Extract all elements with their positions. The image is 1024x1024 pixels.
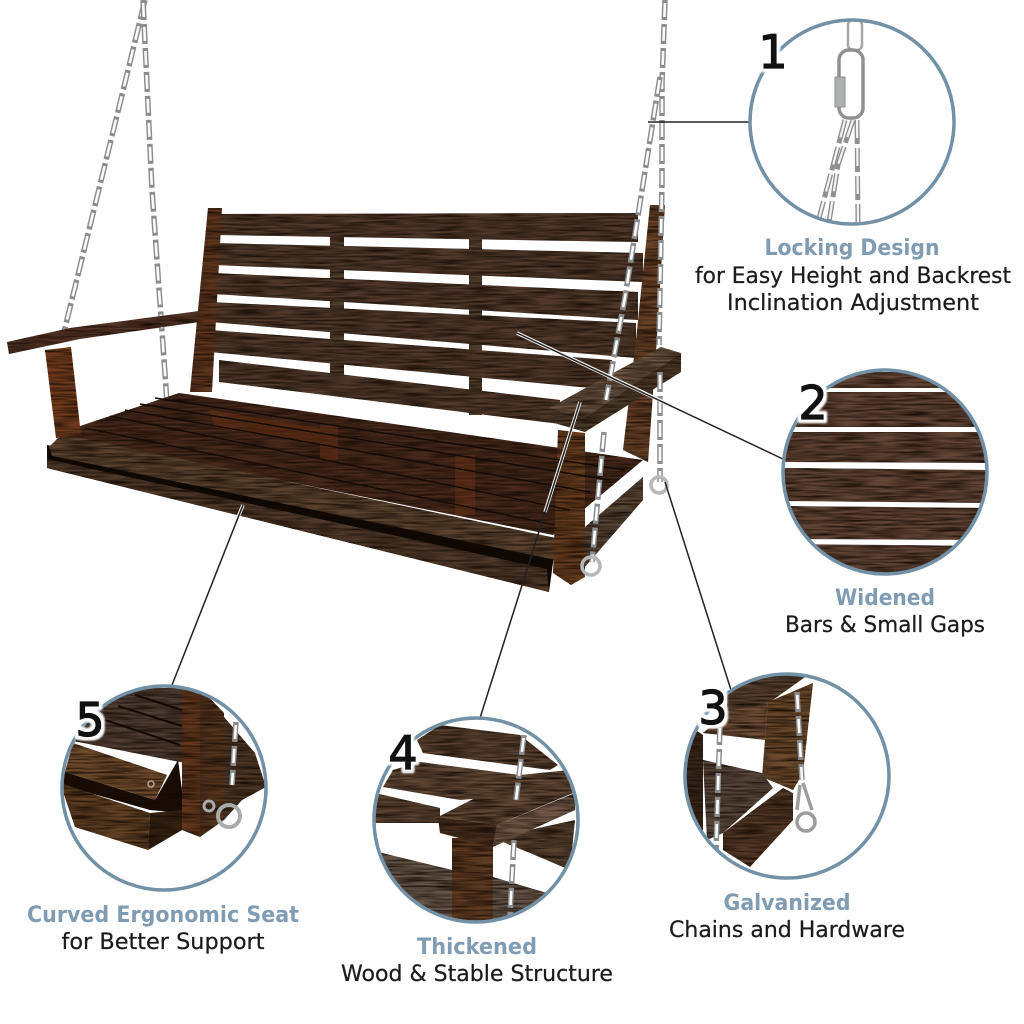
caption 1 [695,236,1011,316]
circle ring [374,718,578,922]
seat front rail [49,434,556,560]
backrest slats [210,213,643,424]
circle ring [685,674,889,878]
circle photo: chain carabiner [818,20,863,222]
number 4: 4 [388,726,418,780]
number 1: 1 [758,25,788,79]
caption 3 [669,891,905,943]
circle ring [62,686,266,890]
detail 2: widened bars [780,370,990,575]
number 3: 3 [698,681,728,735]
caption 5: for Better Support [62,930,265,955]
number 5: 5 [75,693,105,747]
left arm and leg [45,347,81,438]
detail 1: locking design [750,20,954,224]
caption 4: Wood & Stable Structure [341,962,613,987]
seat lower rail [47,459,549,592]
swing wood frame [7,205,681,592]
detail 3: galvanized chains [680,670,889,878]
rear and left chains [64,0,167,402]
caption 3: Galvanized [724,891,850,916]
caption 1: Locking Design [764,236,940,261]
circle photo: armrest and post [376,725,575,920]
detail 5: curved ergonomic seat [60,686,266,890]
caption 3: Chains and Hardware [669,918,905,943]
circle photo: wide slats [780,370,990,575]
right front leg [553,430,585,585]
caption 2 [785,586,985,638]
right arm [549,347,681,418]
seat reflections [210,410,475,515]
caption 2: Widened [835,586,935,611]
side rail [571,477,643,583]
leader lines [172,122,785,718]
caption 4 [341,935,613,987]
left and right back posts [190,208,222,392]
seat slat gaps [85,398,625,525]
circle photo: seat edge [60,688,266,850]
caption 1: Inclination Adjustment [727,291,979,316]
porch swing illustration [7,0,681,592]
shackle rings [582,477,667,575]
caption 1: for Easy Height and Backrest [695,264,1011,289]
front right chains [592,0,665,562]
detail 4: thickened wood [370,715,585,925]
seat underside shadow [47,445,556,592]
seat [58,393,643,535]
caption 5 [27,903,299,955]
circle ring [783,370,987,574]
back supports [330,225,482,415]
caption 2: Bars & Small Gaps [785,613,985,638]
caption 5: Curved Ergonomic Seat [27,903,299,928]
caption 4: Thickened [417,935,537,960]
circle ring [750,20,954,224]
circle photo: arm and hardware [680,670,815,867]
number 2: 2 [798,376,828,430]
